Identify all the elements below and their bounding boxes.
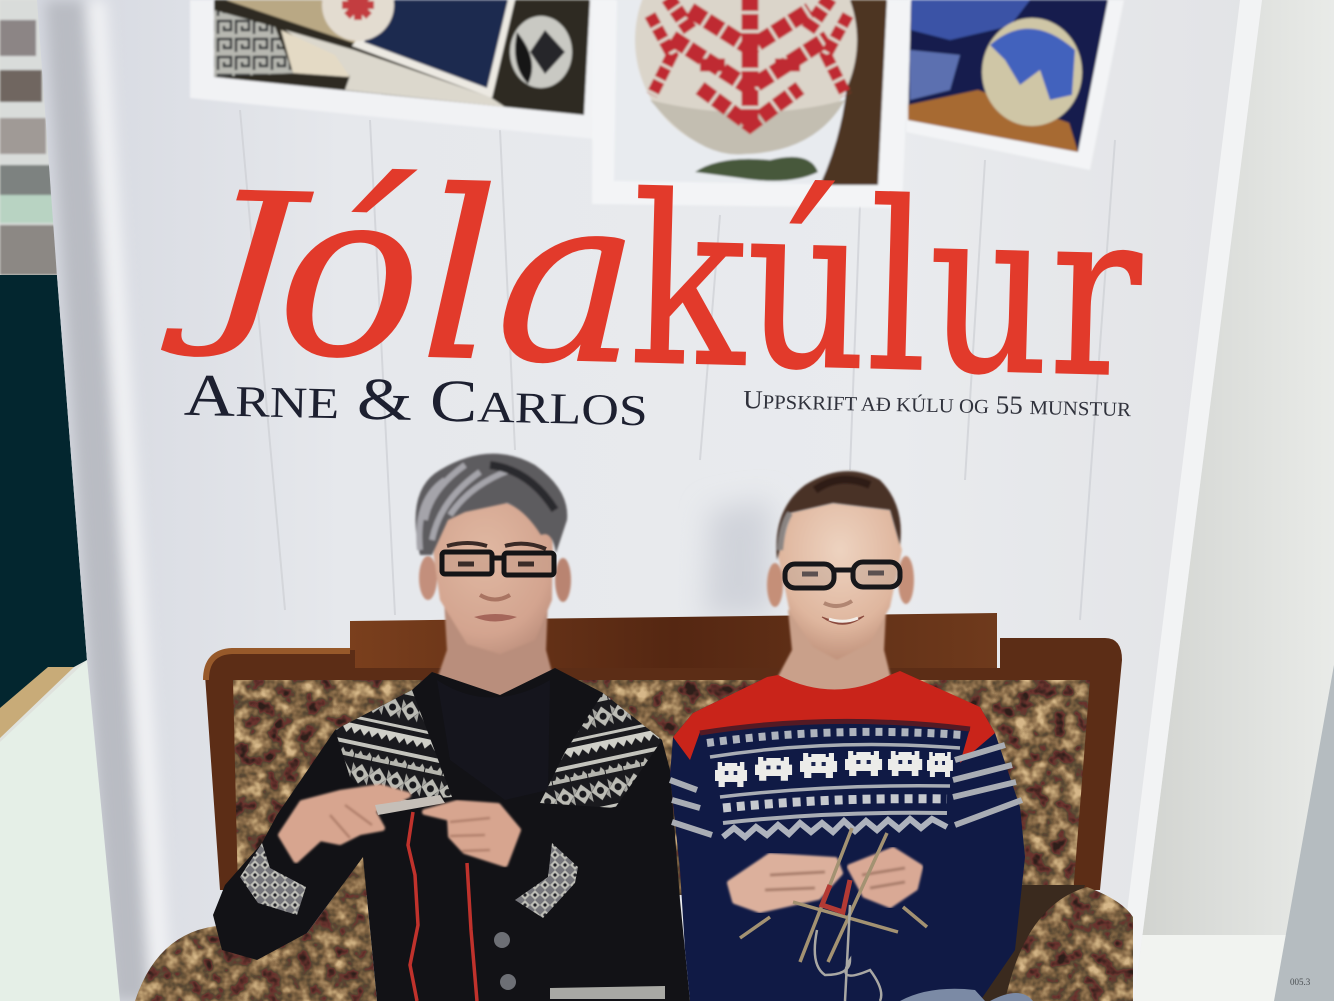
patterned yoke [670,721,1022,837]
grey hair [416,454,567,555]
title: Jólakúlur: kúlur [628,147,1144,430]
eyes [802,573,884,574]
sofa back rail [350,613,997,672]
ornament body [635,0,857,154]
navy framed card [352,0,515,98]
triangle row [707,732,963,743]
red yoke [673,671,995,763]
tapestry upholstery [233,680,1090,895]
photo: red knitted ornament [592,0,911,208]
buttons [494,932,516,990]
cream card [281,30,350,77]
left hand [730,856,840,910]
right man: Carlos [670,471,1033,1001]
hem band [550,986,665,999]
title: Jólakúlur: J [161,153,315,364]
left hand [281,787,408,860]
right hand [425,803,518,864]
left sleeve bands [670,780,712,835]
invader row [715,751,953,787]
sofa [135,613,1133,1001]
glasses [442,552,554,575]
black T-shirt [437,680,550,800]
nose shadow [480,595,510,600]
grey yarn [815,905,881,1001]
right nordic yoke [540,693,662,808]
red yarn [408,812,477,1001]
photo: blue knitted ornament [906,0,1124,170]
left cuff [240,843,306,915]
title: Jólakúlur: óla [275,137,643,417]
black and white ball [510,16,572,88]
eyes [458,562,534,566]
right cuff [515,843,578,918]
right hand [850,850,920,905]
glasses [785,562,900,588]
maroon scallops [700,721,970,733]
knitting strip [375,795,445,815]
left armrest and seat [135,857,377,1001]
needles [740,828,927,962]
zigzag row [723,819,947,837]
left nordic yoke [335,690,452,803]
red snowflake [650,0,848,128]
head and neck [767,503,914,700]
neck and head [419,500,571,702]
shadow on wall behind men [705,500,772,618]
navy sweater [670,673,1025,1001]
right armrest [1005,887,1133,1001]
seat shadow right [960,885,1085,1001]
greek key paper [214,10,293,77]
brown hair [776,471,901,560]
smile [822,616,864,624]
red embroidered ornament [322,0,394,41]
eyebrows [447,543,546,549]
jeans and white glove [900,989,1033,1001]
lips [474,614,517,622]
moss [695,157,818,181]
black cardigan [213,668,690,1001]
red knitting [822,880,850,912]
sofa frame [205,638,1122,890]
title: Jólakúlur [160,134,1144,430]
right book with label: 005.3 [1290,977,1311,987]
nose shadow [824,601,852,606]
subtitle: recipe and patterns: UPPSKRIFT AÐ KÚLU OG 55 MUNSTUR [743,385,1132,422]
snowflake row [723,799,947,808]
right sleeve bands [953,745,1022,825]
tan tray [226,0,400,45]
photo: embroidered ornament on papers [190,0,614,140]
authors: Arne & Carlos: ARNE & C ARLOS [183,362,649,438]
ball [982,18,1082,126]
white floor [285,30,505,107]
left man: Arne [213,454,690,1001]
